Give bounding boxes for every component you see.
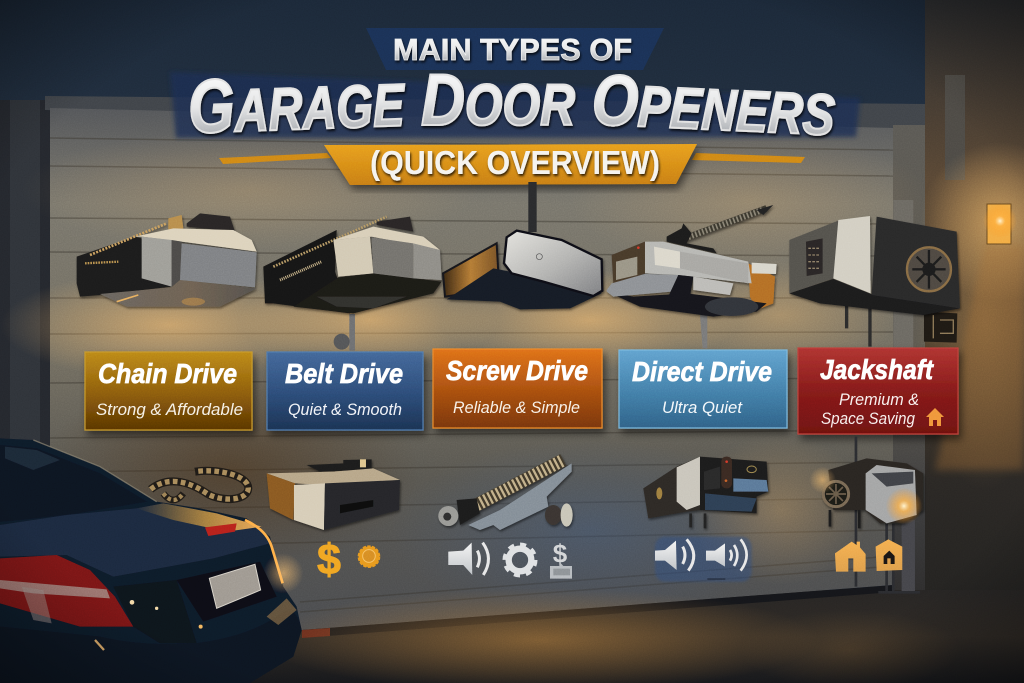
panel: screw drive label: Reliable & Simple — [453, 398, 580, 417]
panel: chain drive label — [85, 352, 252, 430]
panel: jackshaft label: Space Saving — [821, 409, 915, 428]
opener: screw drive unit — [443, 182, 602, 309]
panel: jackshaft label: Jackshaft — [820, 354, 934, 385]
car — [0, 438, 303, 683]
orange subtitle ribbon — [324, 144, 697, 185]
panel: jackshaft label — [798, 348, 958, 434]
subtitle: quick overview: (QUICK OVERVIEW) — [370, 144, 660, 181]
rear trunk panel — [113, 580, 197, 643]
icons: quiet speakers — [655, 537, 752, 582]
panel: belt drive label: Quiet & Smooth — [288, 400, 402, 419]
icon: house with door — [876, 539, 902, 571]
panel: screw drive label: Screw Drive — [446, 355, 588, 386]
opener: chain drive unit — [77, 213, 257, 307]
panel: belt drive label: Belt Drive — [285, 358, 403, 389]
icon: small chain drive unit — [267, 459, 400, 530]
panel: direct drive label: Direct Drive — [632, 356, 772, 387]
garage door — [0, 108, 930, 640]
car edge glow — [245, 520, 283, 583]
opener: direct drive style unit — [607, 205, 777, 348]
orange ribbon wings — [219, 153, 805, 164]
panel: direct drive label: Ultra Quiet — [662, 398, 743, 417]
wall lamp — [920, 142, 1024, 470]
floor — [0, 590, 1024, 683]
panel: belt drive label — [267, 352, 423, 430]
icon: dollar sign: $ — [317, 536, 341, 584]
panel: chain drive label: Chain Drive — [98, 358, 237, 389]
opener: jackshaft unit — [789, 200, 960, 348]
heading: garage door openers: OPENERS — [590, 60, 837, 151]
icon: gear — [504, 544, 536, 576]
icon: speaker — [448, 543, 488, 575]
panel: screw drive label — [433, 349, 602, 428]
trunk lid — [0, 503, 270, 577]
icon: dollar on base: $ — [553, 538, 568, 568]
title backing banners — [170, 28, 860, 138]
panel: jackshaft label: Premium & — [839, 390, 919, 409]
bumper — [0, 611, 302, 683]
tail light — [0, 555, 133, 627]
icon: quality badge — [359, 546, 379, 567]
icon: small screw drive unit — [438, 460, 573, 530]
opener: belt drive unit — [263, 217, 442, 351]
icon: dollar on base — [550, 538, 572, 579]
heading: main types of: MAIN TYPES OF — [393, 32, 632, 67]
panel: chain drive label: Strong & Affordable — [96, 400, 243, 419]
heading: garage door openers — [187, 57, 837, 151]
car rear window — [0, 445, 147, 522]
icon: small jackshaft unit — [809, 437, 923, 593]
icon: small direct drive unit — [643, 457, 768, 528]
panel: direct drive label — [619, 350, 787, 428]
heading: garage door openers: GARAGE — [187, 57, 407, 150]
car body — [0, 438, 302, 683]
floor light patches — [260, 588, 960, 683]
centre brake light — [205, 523, 237, 536]
licence plate — [209, 564, 261, 608]
title block — [170, 28, 860, 185]
icon: coiled chain — [151, 471, 248, 500]
icon: house — [835, 542, 866, 572]
heading: garage door openers: DOOR — [421, 60, 575, 141]
